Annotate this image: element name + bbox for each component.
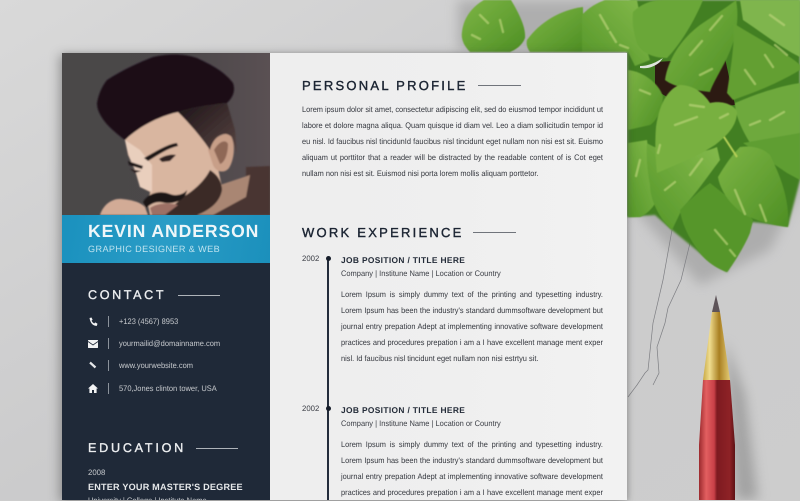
personal profile text <box>302 105 603 178</box>
contact: phone: +123 (4567) 8953 <box>119 317 178 326</box>
work experience heading: WORK EXPERIENCE <box>302 225 464 240</box>
contact: email <box>88 338 220 349</box>
degree: ENTER YOUR MASTER'S DEGREE <box>88 482 243 492</box>
contact section <box>88 288 220 394</box>
job description: Lorem Ipsum is simply dummy text of the printing and typesetting industry. <box>341 290 603 299</box>
icon: envelope <box>88 340 98 348</box>
icon: phone <box>90 318 98 326</box>
timeline dot <box>326 406 330 411</box>
personal profile text: Lorem ipsum dolor sit amet, consectetur adipiscing elit, sed do eiusmod tempor incididunt ut <box>302 105 603 114</box>
year: 2002 <box>302 254 319 263</box>
year: 2002 <box>302 404 319 413</box>
contact: phone <box>90 316 178 327</box>
personal profile text: nullam non nisi est sit. Euismod nisi porta lorem mollis aliquam porttetor. <box>302 169 538 178</box>
resume paper <box>62 53 627 500</box>
name: KEVIN ANDERSON <box>88 221 259 241</box>
plant <box>462 0 800 272</box>
job description: journal entry prepation Adept at implementing innovative software development <box>341 322 603 331</box>
plant shadow <box>458 0 800 285</box>
personal profile heading: PERSONAL PROFILE <box>302 78 468 93</box>
job title: JOB POSITION / TITLE HERE <box>341 405 465 415</box>
contact: email: yourmailid@domainname.com <box>119 339 220 348</box>
education section <box>88 441 243 500</box>
job description: Lorem Ipsum is simply dummy text of the printing and typesetting industry. <box>341 440 603 449</box>
icon: link <box>89 362 96 368</box>
job description: Lorem Ipsum has been the industry's standard dummsoftware development but <box>341 456 603 465</box>
job description: nisl. Id faucibus nisl tincidunt eget nullam non nisi estrtyu sit. <box>341 354 538 363</box>
job description: practices and procedures prepation i am a I have excellent manage ment exper <box>341 338 603 347</box>
contact: address: 570,Jones clinton tower, USA <box>119 384 217 393</box>
job description: journal entry prepation Adept at implementing innovative software development <box>341 472 603 481</box>
education year: 2008 <box>88 468 105 477</box>
pen <box>699 295 758 500</box>
contact: address <box>88 383 217 394</box>
timeline dot <box>326 256 330 261</box>
job description <box>340 440 603 497</box>
contact: website <box>89 360 193 371</box>
job description <box>340 290 603 363</box>
role: GRAPHIC DESIGNER & WEB <box>88 244 220 254</box>
company: Company | Institune Name | Location or Country <box>341 419 501 428</box>
personal profile text: labore et dolore magna aliqua. Quam quisque id diam vel. Leo a diam sollicitudin tempor id <box>302 121 603 130</box>
icon: house <box>88 384 98 393</box>
portrait photo <box>62 53 270 215</box>
marble cracks <box>628 230 690 397</box>
personal profile text: aliquam ut porttitor that a reader will be distracted by the readable content of is Cot eget <box>302 153 603 162</box>
job description: Lorem Ipsum has been the industry's standard dummsoftware development but <box>341 306 603 315</box>
education heading: EDUCATION <box>88 441 186 455</box>
personal profile text: eu nisl. Id faucibus nisl tincidunId faucibus nisl tincidunt eget nullam non nisi est sit. Euismo <box>302 137 603 146</box>
sidebar <box>62 53 270 500</box>
contact: website: www.yourwebsite.com <box>119 361 193 370</box>
job title: JOB POSITION / TITLE HERE <box>341 255 465 265</box>
contact heading: CONTACT <box>88 288 166 302</box>
name band <box>62 215 270 263</box>
timeline <box>326 256 331 500</box>
job description: practices and procedures prepation i am a I have excellent manage ment exper <box>341 488 603 497</box>
company: Company | Institune Name | Location or Country <box>341 269 501 278</box>
